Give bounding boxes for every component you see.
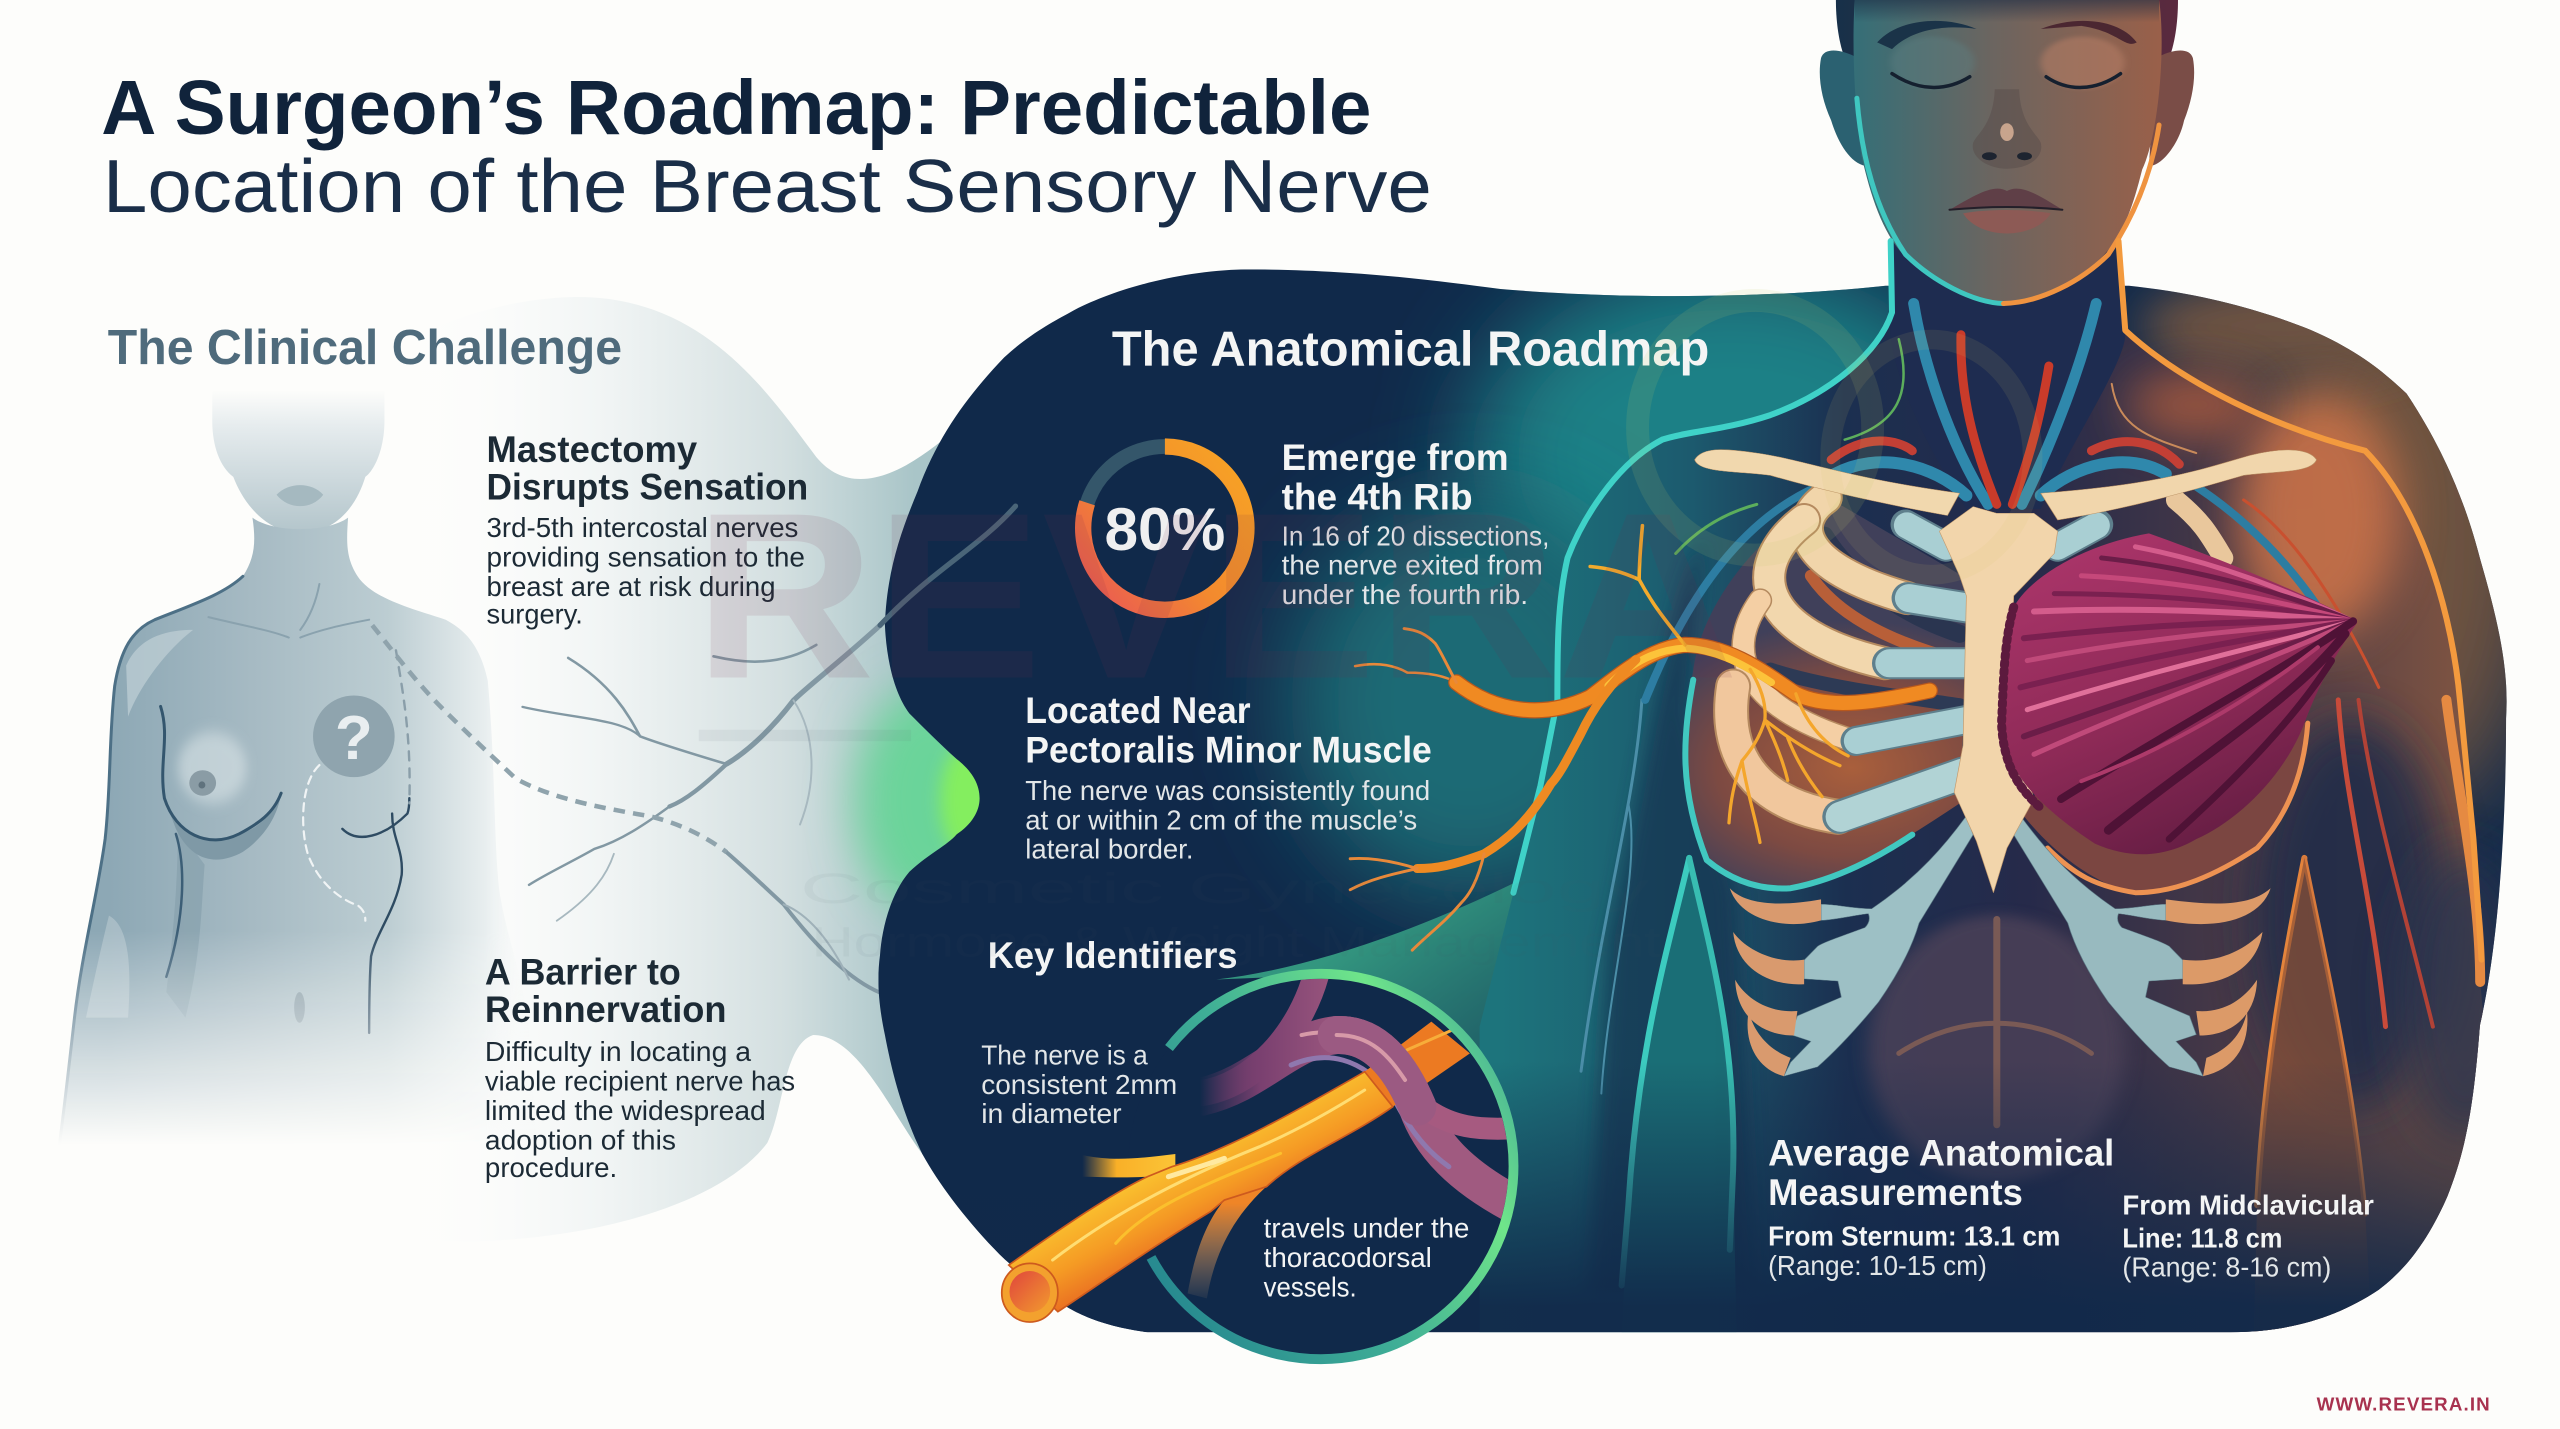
- flank vessels: [1581, 700, 2480, 1214]
- sternum: [1939, 507, 2058, 893]
- text block: mastectomy disrupts sensation: breast are at risk during: [487, 571, 776, 602]
- icon: nipple: [189, 770, 216, 796]
- icon: grey nerve branches: [522, 625, 934, 1045]
- text block: emerge from the 4th rib: In 16 of 20 dissections,: [1282, 520, 1549, 551]
- text block: travels under vessels: vessels.: [1264, 1271, 1357, 1302]
- text block: from midclavicular line: From Midclavicular: [2122, 1190, 2374, 1221]
- tube highlights: [1053, 1090, 1365, 1260]
- nerve: main orange trunk: [1350, 526, 1930, 950]
- nerve: stem crossing panel: [880, 506, 1016, 625]
- text block: average anatomical measurements: Measurements: [1768, 1172, 2023, 1213]
- text block: a barrier to reinnervation: procedure.: [485, 1152, 617, 1183]
- abdomen: [1868, 915, 2125, 1183]
- rib tips left: [1730, 888, 1821, 1076]
- text block: mastectomy disrupts sensation: providing sensation to the: [487, 542, 805, 573]
- text block: 2mm diameter: [981, 1039, 1177, 1129]
- icon: question mark: [313, 695, 395, 777]
- icon: eyelids: [1891, 37, 1974, 88]
- lower branch: [1188, 1183, 1270, 1298]
- breast contour: [161, 706, 281, 840]
- heading: the anatomical roadmap: The Anatomical Roadmap: [1112, 323, 1709, 377]
- navel: [294, 992, 305, 1023]
- panel: clinical challenge backdrop: [568, 297, 980, 1232]
- illustration: head, neck and ribcage: [1513, 0, 2482, 1076]
- text block: 2mm diameter: The nerve is a: [981, 1039, 1148, 1070]
- text block: a barrier to reinnervation: viable recipient nerve has: [485, 1066, 795, 1097]
- heading: the clinical challenge: The Clinical Challenge: [108, 321, 622, 375]
- text block: travels under vessels: [1264, 1212, 1469, 1302]
- teal flank wedge: [1622, 858, 1737, 1335]
- head: [212, 390, 384, 533]
- text block: emerge from the 4th rib: the nerve exited from: [1282, 550, 1543, 581]
- face lips: [277, 485, 323, 506]
- orange flank wedge: [2254, 858, 2372, 1335]
- jaw outlines: [1857, 98, 2004, 304]
- text block: average anatomical measurements: From Sternum: 13.1 cm: [1768, 1221, 2060, 1252]
- tube cut end: [1002, 1263, 1058, 1322]
- arm shadow band: [1590, 556, 1748, 1262]
- text block: located near pectoralis minor: lateral border.: [1025, 834, 1193, 865]
- thorax stripes: [1770, 536, 1960, 705]
- text block: mastectomy disrupts sensation: surgery.: [487, 599, 583, 630]
- neck: [1890, 232, 2125, 509]
- text block: located near pectoralis minor: The nerve was consistently found: [1025, 775, 1430, 806]
- text block: located near pectoralis minor: [1025, 690, 1432, 865]
- icon: lips: [1949, 189, 2062, 210]
- torso silhouette: [57, 518, 538, 1160]
- icon: right ear: [2149, 50, 2194, 166]
- text block: a barrier to reinnervation: adoption of this: [485, 1124, 676, 1155]
- icon: closed eyes: [1892, 74, 2121, 87]
- footer url: WWW.REVERA.IN: [2317, 1394, 2490, 1415]
- text block: a barrier to reinnervation: A Barrier to: [485, 951, 681, 992]
- text block: 2mm diameter: consistent 2mm: [981, 1069, 1177, 1100]
- face: [1854, 0, 2162, 304]
- heading: key identifiers: Key Identifiers: [988, 935, 1238, 976]
- inset disc: [1128, 974, 1513, 1359]
- chart: 80% donut: [1083, 447, 1247, 610]
- watermark: REVERA: [694, 465, 1739, 729]
- left clavicle: [1695, 450, 1960, 516]
- vessels: [1200, 970, 1512, 1203]
- icon: nose: [1973, 89, 2041, 169]
- bottom fade: [908, 1071, 2472, 1332]
- text block: average anatomical measurements: (Range: 10-15 cm): [1768, 1250, 1987, 1281]
- text block: emerge from the 4th rib: [1282, 437, 1549, 610]
- text block: located near pectoralis minor: at or within 2 cm of the muscle’s: [1025, 804, 1417, 835]
- grey dashed nerve route: [372, 625, 727, 852]
- icon: question mark: ?: [335, 704, 373, 773]
- nerve tube: [1002, 1022, 1470, 1322]
- text block: mastectomy disrupts sensation: 3rd-5th intercostal nerves: [487, 512, 798, 543]
- text block: from midclavicular line: [2122, 1190, 2374, 1283]
- icon: shoulder and collar lines: [57, 576, 243, 1160]
- thorax outline: [1685, 680, 1912, 889]
- muscle fibres: [2002, 547, 2353, 839]
- text block: mastectomy disrupts sensation: Disrupts Sensation: [487, 467, 808, 508]
- side shading: [166, 829, 205, 1018]
- tube body: [1009, 1072, 1393, 1312]
- reconstructed breast contour: [342, 798, 409, 1033]
- breast shadow: [166, 793, 281, 860]
- text block: located near pectoralis minor: Located Near: [1025, 690, 1251, 731]
- text block: a barrier to reinnervation: Reinnervation: [485, 989, 727, 1030]
- text block: mastectomy disrupts sensation: [487, 429, 808, 630]
- upper stub: [1365, 1022, 1470, 1107]
- costal cartilage left: [1784, 816, 1973, 1076]
- body outline: teal: [1513, 241, 1892, 893]
- watermark: [694, 300, 2033, 966]
- watermark: Hormone & Weight Management: [811, 919, 1661, 966]
- text block: mastectomy disrupts sensation: Mastectomy: [487, 429, 698, 470]
- neck vessels: [1645, 304, 2379, 700]
- hair: [1836, 0, 2178, 58]
- title: A Surgeon’s Roadmap: Predictable: [101, 66, 1371, 151]
- shoulder glow: [2237, 392, 2400, 637]
- title: Location of the Breast Sensory Nerve: [103, 144, 1432, 228]
- text block: travels under vessels: travels under the: [1264, 1212, 1469, 1243]
- redraw vessel crossing: [1337, 1035, 1417, 1107]
- arm highlight: [126, 630, 193, 717]
- torso silhouette: [1480, 325, 2483, 1332]
- text block: from midclavicular line: (Range: 8-16 cm): [2122, 1252, 2331, 1283]
- title: [101, 66, 1432, 228]
- illustration: challenge figure: [57, 390, 727, 1160]
- ribs: [1731, 498, 2223, 817]
- text block: average anatomical measurements: [1768, 1133, 2114, 1281]
- upper branch: [1082, 1154, 1175, 1177]
- body outline: orange: [2118, 241, 2482, 960]
- nerve: upper twigs: [1590, 526, 1685, 645]
- icon: left ear: [1820, 50, 1868, 166]
- watermark: Cosmetic Gynecology: [800, 865, 1651, 912]
- magnifier ring: [1151, 974, 1514, 1359]
- nerve: descending branch: [1417, 660, 1636, 869]
- thorax cavity: [1686, 495, 1970, 889]
- incision dashed line: [303, 765, 365, 921]
- panel: anatomical roadmap: [865, 261, 2547, 1355]
- costal cartilage right: [2014, 816, 2203, 1076]
- right clavicle: [2041, 450, 2317, 520]
- text block: emerge from the 4th rib: Emerge from: [1282, 437, 1509, 478]
- text block: emerge from the 4th rib: under the fourth rib.: [1282, 579, 1528, 610]
- grey dashed vertical: [396, 650, 410, 803]
- text block: average anatomical measurements: Average Anatomical: [1768, 1133, 2114, 1174]
- text block: a barrier to reinnervation: [485, 951, 795, 1183]
- nerve: fan: [1729, 669, 1848, 842]
- text block: a barrier to reinnervation: Difficulty in locating a: [485, 1036, 752, 1067]
- breast highlight: [178, 732, 247, 803]
- rib tips right: [2166, 888, 2271, 1076]
- text block: from midclavicular line: Line: 11.8 cm: [2122, 1222, 2282, 1253]
- text block: located near pectoralis minor: Pectoralis Minor Muscle: [1025, 729, 1432, 770]
- chart: 80% donut: 80%: [1104, 495, 1225, 563]
- illustration: anatomical torso: [865, 241, 2531, 1339]
- icon: eyebrows: [1877, 21, 1977, 49]
- text block: 2mm diameter: in diameter: [981, 1098, 1122, 1129]
- inset: key identifiers magnifier: [1002, 970, 1514, 1359]
- text block: travels under vessels: thoracodorsal: [1264, 1242, 1432, 1273]
- text block: emerge from the 4th rib: the 4th Rib: [1282, 476, 1473, 517]
- pectoralis muscle: [2002, 533, 2357, 854]
- text block: a barrier to reinnervation: limited the widespread: [485, 1095, 766, 1126]
